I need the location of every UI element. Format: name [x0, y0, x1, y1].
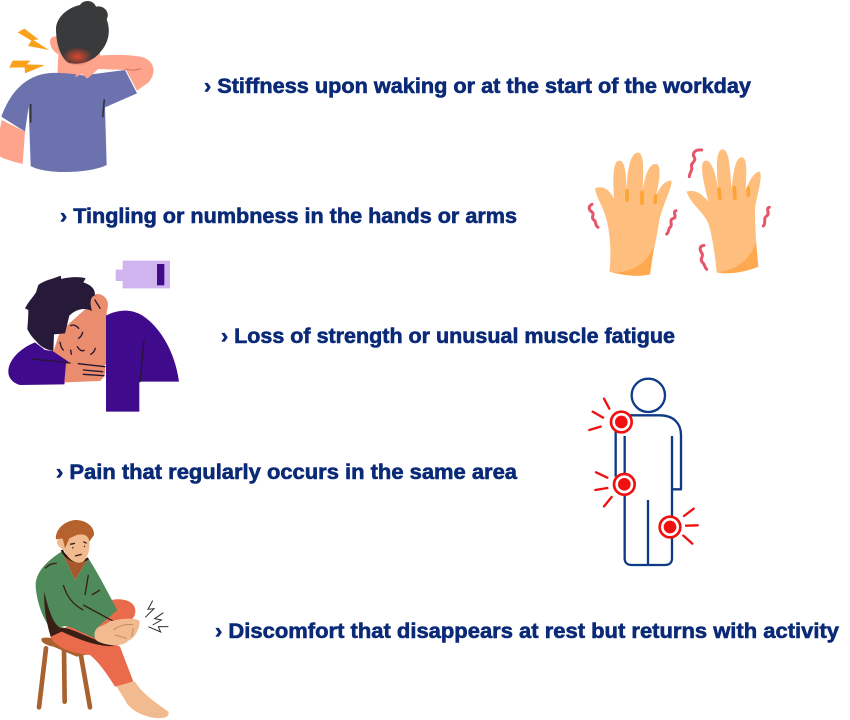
icon: man with neck pain [0, 1, 154, 172]
text: discomfort: › Discomfort that disappears at rest but returns with activity [215, 620, 839, 643]
text: pain: › Pain that regularly occurs in the same area [56, 461, 517, 484]
icon: man holding sore foot on stool [36, 520, 169, 718]
text: loss of strength: › Loss of strength or unusual muscle fatigue [221, 325, 675, 348]
icon: low battery [116, 261, 170, 288]
icon: tired man with low battery [8, 261, 179, 412]
text: stiffness: › Stiffness upon waking or at the start of the workday [204, 75, 751, 98]
icon: tingling hands [589, 149, 769, 276]
text: tingling: › Tingling or numbness in the hands or arms [60, 205, 517, 228]
icon: body with pain points [589, 379, 698, 565]
